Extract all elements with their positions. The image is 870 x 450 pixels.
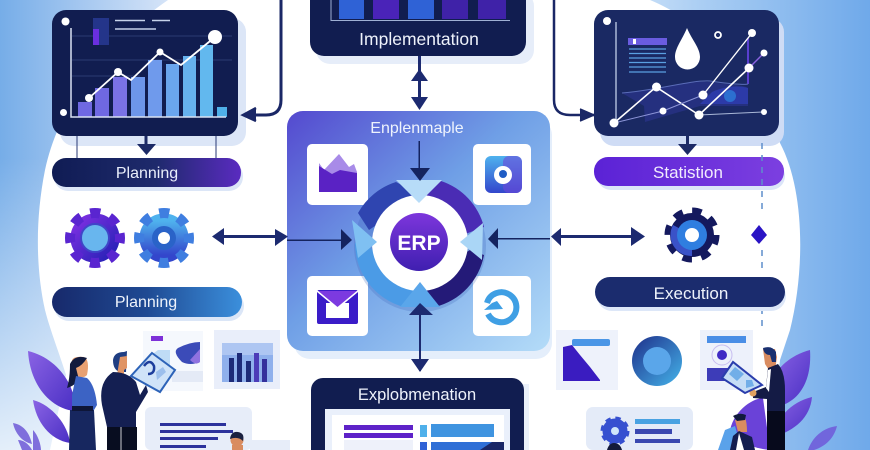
panel: top right chart [594, 10, 784, 146]
panel: Explobmenation: Explobmenation [358, 386, 476, 404]
panel: Implementation [310, 0, 534, 64]
person: right small [730, 414, 755, 450]
mini panel: pie dashboard [143, 331, 203, 391]
person: man with tablet [101, 351, 175, 450]
mini panel: bar chart [214, 330, 280, 389]
arrow: left double [212, 228, 288, 246]
icon: blue disc [632, 336, 682, 386]
arrow: centre to Explobmenation [409, 303, 433, 372]
panel: Explobmenation [311, 378, 529, 450]
pill: Planning lower: Planning [115, 294, 177, 311]
arrow: right panel to Statistion [678, 136, 697, 155]
bar chart [78, 45, 227, 117]
mini panel: mountain [556, 330, 618, 390]
connector: panel to Planning [77, 136, 216, 158]
arrow: elbow to centre right [554, 0, 594, 121]
ERP badge: ERP [397, 232, 441, 255]
panel: top left chart [52, 10, 246, 146]
icon: tablet [131, 353, 175, 392]
panel: Implementation: Implementation [359, 29, 479, 49]
icon: water drop [675, 28, 700, 70]
person: right standing man [722, 347, 785, 450]
card: eye icon [473, 144, 531, 205]
leaves: left [13, 351, 75, 450]
pill: Planning top [52, 158, 243, 191]
mini panel: lines card left [145, 407, 290, 450]
mini panel: gear lines card [586, 407, 693, 450]
icon: diamond and dashed line [751, 143, 767, 332]
arrows into ring [287, 141, 550, 250]
mini panel: target card [700, 330, 753, 390]
person: woman [67, 357, 97, 450]
card: chart icon [307, 144, 368, 205]
card: mail icon [307, 276, 368, 336]
pill: Statistion: Statistion [653, 163, 723, 182]
ring arrowheads [352, 180, 483, 307]
card: refresh icon [473, 276, 531, 336]
pill: Execution: Execution [654, 284, 728, 303]
person: small head [230, 432, 244, 450]
panel: centre ERP block [287, 111, 552, 359]
pill: Planning lower [52, 287, 244, 321]
leaves: right [718, 350, 837, 450]
arrow: right double [551, 227, 645, 246]
line chart [610, 29, 768, 128]
gear: blue [139, 213, 189, 263]
bar chart: top [331, 0, 510, 20]
arrow: elbow to top left panel [243, 0, 281, 121]
heading: Enplenmaple: Enplenmaple [370, 120, 464, 137]
pill: Execution [595, 277, 786, 311]
gear: dark [669, 212, 715, 258]
ERP ring [352, 180, 486, 312]
arrow: Implementation to centre [411, 56, 428, 110]
pill: Statistion [594, 157, 785, 190]
pill: Planning top: Planning [116, 165, 178, 182]
gear: purple [70, 213, 120, 263]
icon: tablet right [722, 362, 762, 393]
text lines block [628, 38, 667, 72]
